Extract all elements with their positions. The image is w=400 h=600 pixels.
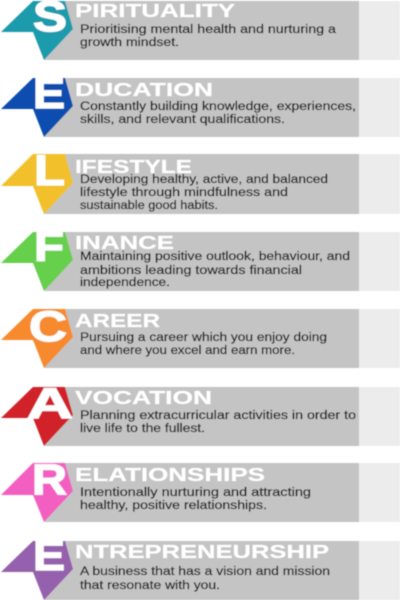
icon: F arrow: F (34, 223, 64, 271)
icon: L arrow (1, 147, 73, 214)
icon: A arrow (1, 380, 73, 446)
row: Entrepreneurship (1, 532, 400, 600)
text: Entrepreneurship description: that resonate with you. (80, 580, 220, 592)
text: Relationships description (80, 487, 311, 512)
row: Lifestyle (1, 147, 400, 214)
text: Education description (80, 101, 356, 126)
heading: Entrepreneurship: NTREPRENEURSHIP (75, 542, 329, 562)
icon: E arrow purple (1, 532, 73, 600)
text: Lifestyle description: lifestyle through mindfulness and (80, 187, 288, 199)
row: Relationships (1, 456, 400, 522)
text: Spirituality description: growth mindset. (80, 37, 179, 49)
heading: Relationships: ELATIONSHIPS (75, 465, 265, 485)
text: Relationships description: healthy, positive relationships. (80, 500, 267, 512)
text: Education description: skills, and relevant qualifications. (80, 114, 285, 126)
heading: Career: AREER (75, 311, 160, 331)
text: Career description: and where you excel and earn more. (80, 345, 295, 357)
heading: Spirituality: PIRITUALITY (75, 1, 235, 21)
row: Avocation (1, 380, 400, 446)
text: Lifestyle description: sustainable good habits. (80, 200, 218, 212)
heading: Finance: INANCE (75, 233, 174, 253)
text: Avocation description: Planning extracurricular activities in order to (80, 410, 356, 422)
icon: A arrow: A (27, 380, 73, 428)
icon: E arrow (1, 70, 73, 137)
text: Lifestyle description: Developing healthy, active, and balanced (80, 174, 328, 186)
icon: F arrow (1, 223, 73, 291)
text: Finance description: ambitions leading towards financial (80, 265, 302, 277)
text: Finance description: Maintaining positive outlook, behaviour, and (80, 251, 350, 263)
text: Lifestyle description (80, 174, 328, 212)
icon: L arrow: L (34, 147, 65, 195)
icon: C arrow: C (29, 303, 67, 351)
icon: C arrow (1, 303, 73, 368)
text: Spirituality description: Prioritising mental health and nurturing a (80, 24, 337, 36)
icon: E arrow purple: E (33, 532, 65, 580)
row: Spirituality (1, 0, 400, 60)
text: Avocation description (80, 410, 356, 435)
text: Entrepreneurship description (80, 566, 330, 592)
text: Finance description (80, 251, 350, 289)
row: Career (1, 303, 400, 368)
row: Finance (1, 223, 400, 291)
heading: Avocation: VOCATION (75, 388, 212, 408)
icon: R arrow (1, 456, 73, 522)
icon: S arrow (1, 0, 73, 60)
text: Relationships description: Intentionally nurturing and attracting (80, 487, 311, 499)
text: Spirituality description (80, 24, 337, 49)
heading: Lifestyle: IFESTYLE (75, 157, 192, 177)
icon: R arrow: R (32, 456, 67, 504)
text: Avocation description: live life to the fullest. (80, 423, 205, 435)
text: Career description: Pursuing a career which you enjoy doing (80, 332, 327, 344)
text: Education description: Constantly building knowledge, experiences, (80, 101, 356, 113)
row: Education (1, 70, 400, 137)
text: Finance description: independence. (80, 277, 170, 289)
icon: E arrow: E (33, 70, 65, 118)
heading: Education: DUCATION (75, 80, 213, 100)
text: Career description (80, 332, 327, 357)
text: Entrepreneurship description: A business that has a vision and mission (80, 566, 330, 578)
